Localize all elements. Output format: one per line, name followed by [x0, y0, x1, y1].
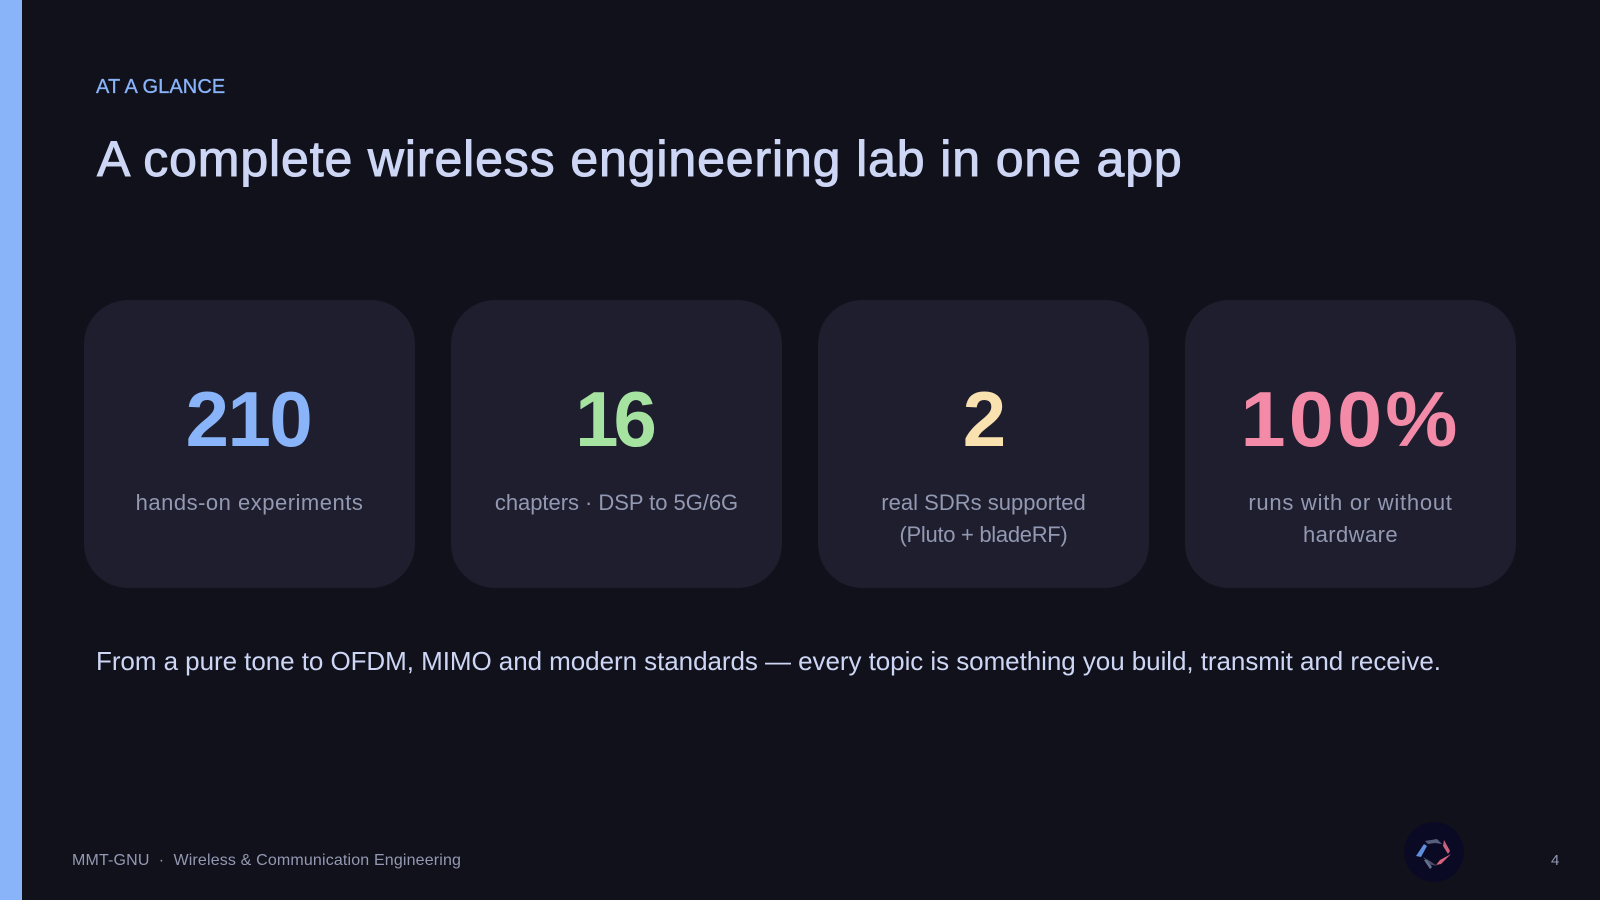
stat caption: SDRs — [881, 490, 1086, 547]
stat number: 100%: 100% — [1241, 375, 1460, 463]
stat caption: hardware: runs with or without — [1248, 490, 1453, 515]
summary sentence: From a pure tone to OFDM, MIMO and modern standards — every topic is something you build, transmit and receive. — [96, 646, 1441, 676]
stat caption: SDRs: (Pluto + bladeRF) — [900, 522, 1067, 547]
stat card: experiments — [84, 300, 415, 588]
stat caption: SDRs: real SDRs supported — [881, 490, 1086, 515]
stat number: 16: 16 — [575, 375, 652, 463]
page number: 4 — [1551, 852, 1559, 869]
stat card: SDRs — [818, 300, 1149, 588]
left accent bar — [0, 0, 22, 900]
eyebrow label: AT A GLANCE — [96, 76, 225, 98]
icon: logo — [1404, 822, 1464, 882]
title: A complete wireless engineering lab in one app — [97, 131, 1183, 187]
stat number: 210: 210 — [186, 375, 311, 463]
stat number: 2: 2 — [963, 375, 1006, 463]
stat caption: chapters: chapters · DSP to 5G/6G — [495, 490, 738, 515]
footer text: MMT-GNU · Wireless & Communication Engineering — [72, 852, 461, 869]
stat caption: hardware — [1248, 490, 1453, 547]
stat card: hardware — [1185, 300, 1516, 588]
stat caption: experiments: hands-on experiments — [136, 490, 363, 515]
stat card: chapters — [451, 300, 782, 588]
stat caption: hardware: hardware — [1303, 522, 1398, 547]
